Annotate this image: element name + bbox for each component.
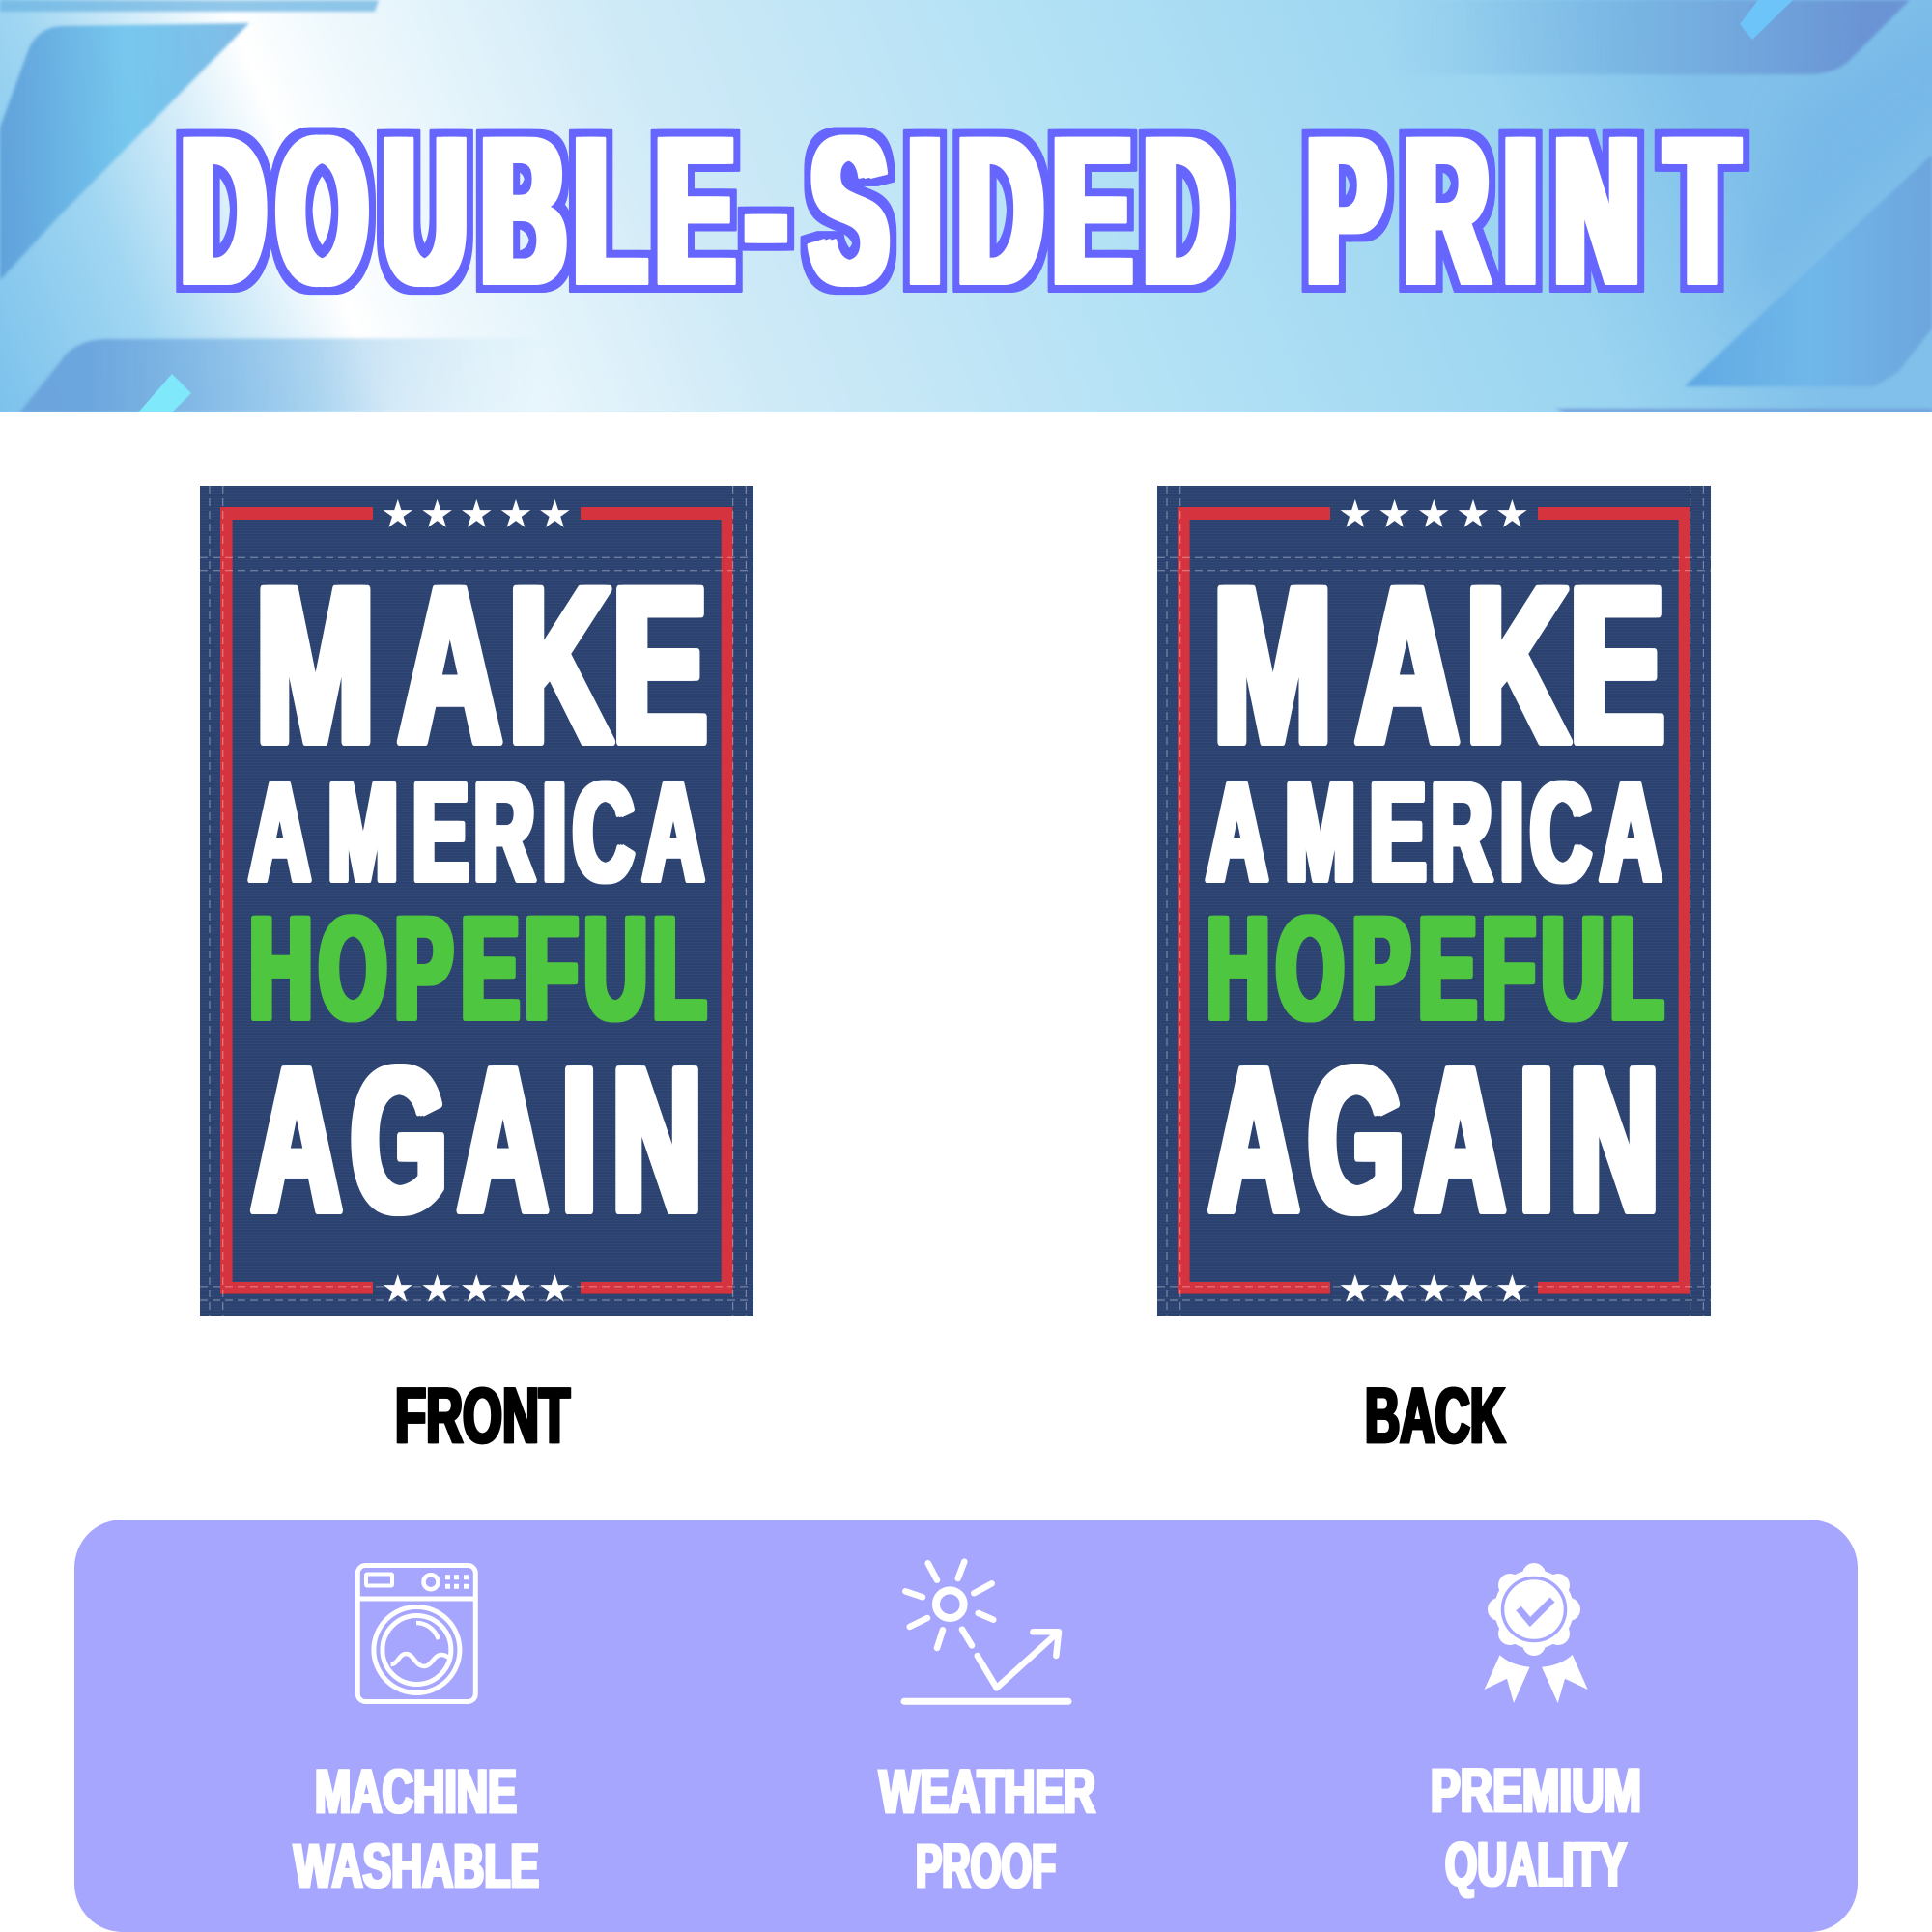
feature: weather proof: WEATHER bbox=[879, 1756, 1095, 1826]
bottom stars bbox=[384, 1274, 570, 1302]
red frame bbox=[220, 507, 733, 1294]
bottom stars bbox=[1341, 1274, 1527, 1302]
feature: premium quality: PREMIUM bbox=[1431, 1756, 1641, 1826]
feature: premium quality bbox=[1431, 1756, 1641, 1899]
flag text: AGAIN: AGAIN bbox=[252, 1027, 701, 1255]
feature: machine washable: MACHINE bbox=[315, 1756, 517, 1826]
panel: features bbox=[74, 1520, 1858, 1932]
flag text: AMERICA: AMERICA bbox=[1207, 755, 1661, 911]
feature: weather proof bbox=[879, 1756, 1095, 1901]
banner background bbox=[0, 0, 1932, 412]
flag text: MAKE: MAKE bbox=[1213, 541, 1664, 789]
title: DOUBLE-SIDED PRINT bbox=[182, 94, 1737, 328]
red frame bbox=[1178, 507, 1690, 1294]
top stars bbox=[1341, 499, 1527, 527]
top stars bbox=[384, 499, 570, 527]
flag text: HOPEFUL: HOPEFUL bbox=[1207, 888, 1663, 1050]
icon: washing machine bbox=[357, 1565, 475, 1702]
feature: premium quality: QUALITY bbox=[1445, 1830, 1627, 1899]
feature: machine washable bbox=[294, 1756, 539, 1901]
flag: front bbox=[200, 486, 753, 1316]
flag text: AMERICA: AMERICA bbox=[249, 755, 703, 911]
icon: sun and weather check bbox=[904, 1562, 1068, 1701]
feature: weather proof: PROOF bbox=[916, 1832, 1056, 1901]
flag: back bbox=[1157, 486, 1711, 1316]
label: back: BACK bbox=[1365, 1373, 1505, 1460]
flag text: HOPEFUL: HOPEFUL bbox=[249, 888, 706, 1050]
flag text: MAKE: MAKE bbox=[256, 541, 707, 789]
flag text: AGAIN: AGAIN bbox=[1209, 1027, 1659, 1255]
feature: machine washable: WASHABLE bbox=[294, 1832, 539, 1901]
icon: quality ribbon bbox=[1485, 1563, 1588, 1703]
label: front: FRONT bbox=[395, 1373, 570, 1460]
